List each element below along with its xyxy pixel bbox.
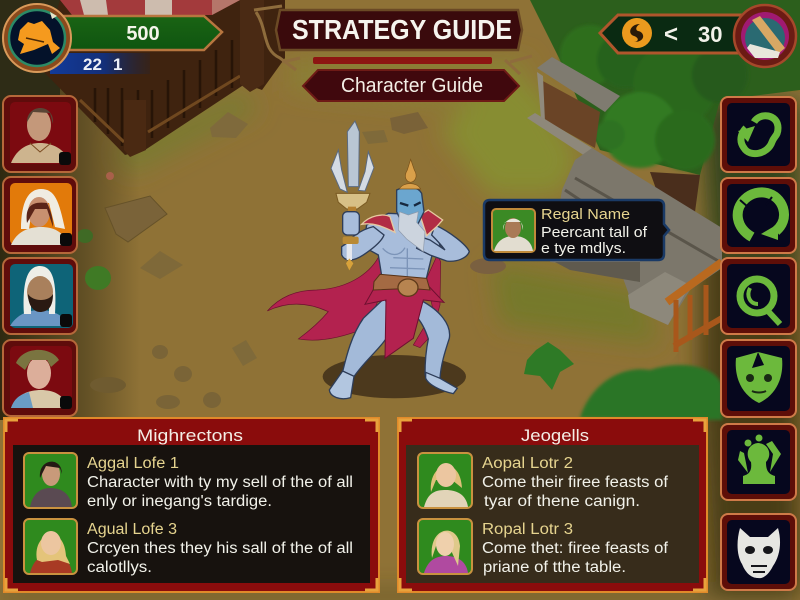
entry text 4: Ropal Lotr 3 (482, 521, 573, 538)
portrait 1: man (3, 96, 77, 172)
left column: character portraits (3, 96, 77, 416)
entry text 3: Agual Lofe 3 (87, 521, 177, 538)
belt (373, 274, 430, 290)
green health bar (62, 16, 222, 50)
feet (329, 371, 457, 399)
entry text 2: Come their firee feasts of (482, 474, 669, 491)
bush (524, 342, 574, 390)
button: magnifier (721, 258, 796, 334)
entry text 1: Character with ty my sell of the of all (87, 474, 353, 491)
treetop mass (530, 0, 800, 175)
blue resource bar: 22 (83, 55, 102, 74)
portrait 2: woman in white hood (3, 177, 77, 253)
blue resource bar: 1 (113, 55, 122, 74)
tooltip text: Peercant tall of (541, 225, 648, 241)
scenery: rocks and small plants (77, 112, 506, 409)
title text: STRATEGY GUIDE (292, 14, 512, 45)
bottom bushes (580, 365, 722, 420)
entry text 4: Come thet: firee feasts of (482, 540, 669, 557)
gold top knot (399, 159, 421, 189)
button: figure with raised arms (721, 424, 796, 500)
scenery: stone building, steps, trees and fence on the right (524, 0, 800, 420)
entry text 1: Aggal Lofe 1 (87, 455, 179, 472)
button: refresh ring (721, 178, 796, 253)
title plate (254, 6, 532, 74)
tooltip portrait (492, 209, 535, 252)
fence (667, 262, 722, 352)
trident (331, 121, 374, 270)
button: white skull mask (721, 514, 796, 590)
entry thumbnail 2 (418, 453, 472, 508)
tooltip: regal name (484, 200, 669, 260)
tooltip text: e tye mdlys. (541, 241, 626, 257)
skirt (365, 283, 444, 358)
entry text 1 (87, 455, 353, 510)
panel: Jeogells (398, 418, 707, 592)
hand on trident (343, 212, 359, 235)
HUD: player avatar and resource bars (3, 4, 222, 74)
avatar medallion (3, 4, 71, 72)
cape (267, 250, 441, 348)
trunk (650, 172, 700, 212)
stone hut (527, 57, 620, 156)
portrait 3: bearded man in white hood (3, 258, 77, 334)
HUD: timer badge (600, 15, 745, 53)
tooltip text: Regal Name (541, 207, 630, 223)
entry thumbnail 3 (24, 519, 77, 574)
coin icon (622, 18, 652, 48)
chest arm (417, 225, 469, 261)
HUD: timer badge: 30 (698, 22, 722, 47)
head (397, 187, 424, 227)
entry text 4 (482, 521, 669, 576)
entry text 2 (482, 455, 669, 510)
wooden building with striped awning (40, 0, 285, 157)
button: cycle arrows (721, 97, 796, 172)
blue resource bar (50, 53, 150, 74)
legs (343, 298, 450, 379)
subtitle plate (303, 70, 519, 101)
entry thumbnail 1 (24, 453, 77, 508)
entry text 3: calotllys. (87, 559, 152, 576)
red divider bar (313, 57, 492, 64)
panel heading: Mighrectons (137, 426, 243, 445)
entry text 2: tyar of thene canign. (484, 493, 640, 510)
portrait 4: woman with green hat (3, 340, 77, 416)
HUD: map emblem (734, 5, 796, 67)
shoulder armour (362, 210, 443, 236)
green health bar: 500 (126, 23, 160, 45)
tooltip text (541, 207, 648, 257)
stone steps (550, 148, 722, 325)
right column: skill buttons (721, 97, 796, 590)
entry text 2: Aopal Lotr 2 (482, 455, 573, 472)
entry thumbnail 4 (418, 519, 472, 574)
subtitle plate: Character Guide (341, 75, 483, 97)
panel: Mighrectons (4, 418, 379, 592)
entry text 3 (87, 521, 353, 576)
ground shadow (323, 355, 466, 398)
raised arm (342, 227, 384, 260)
entry text 4: priane of tthe table. (483, 559, 626, 576)
HUD: timer badge: < (664, 21, 678, 48)
entry text 1: enly or inegang's tardige. (87, 493, 272, 510)
button: green shield face (721, 340, 796, 417)
entry text 3: Crcyen thes they his sall of the of all (87, 540, 353, 557)
hero character: blue warrior with trident (267, 121, 469, 399)
torso (363, 213, 441, 280)
panel heading: Jeogells (521, 426, 589, 445)
beard (398, 212, 425, 252)
